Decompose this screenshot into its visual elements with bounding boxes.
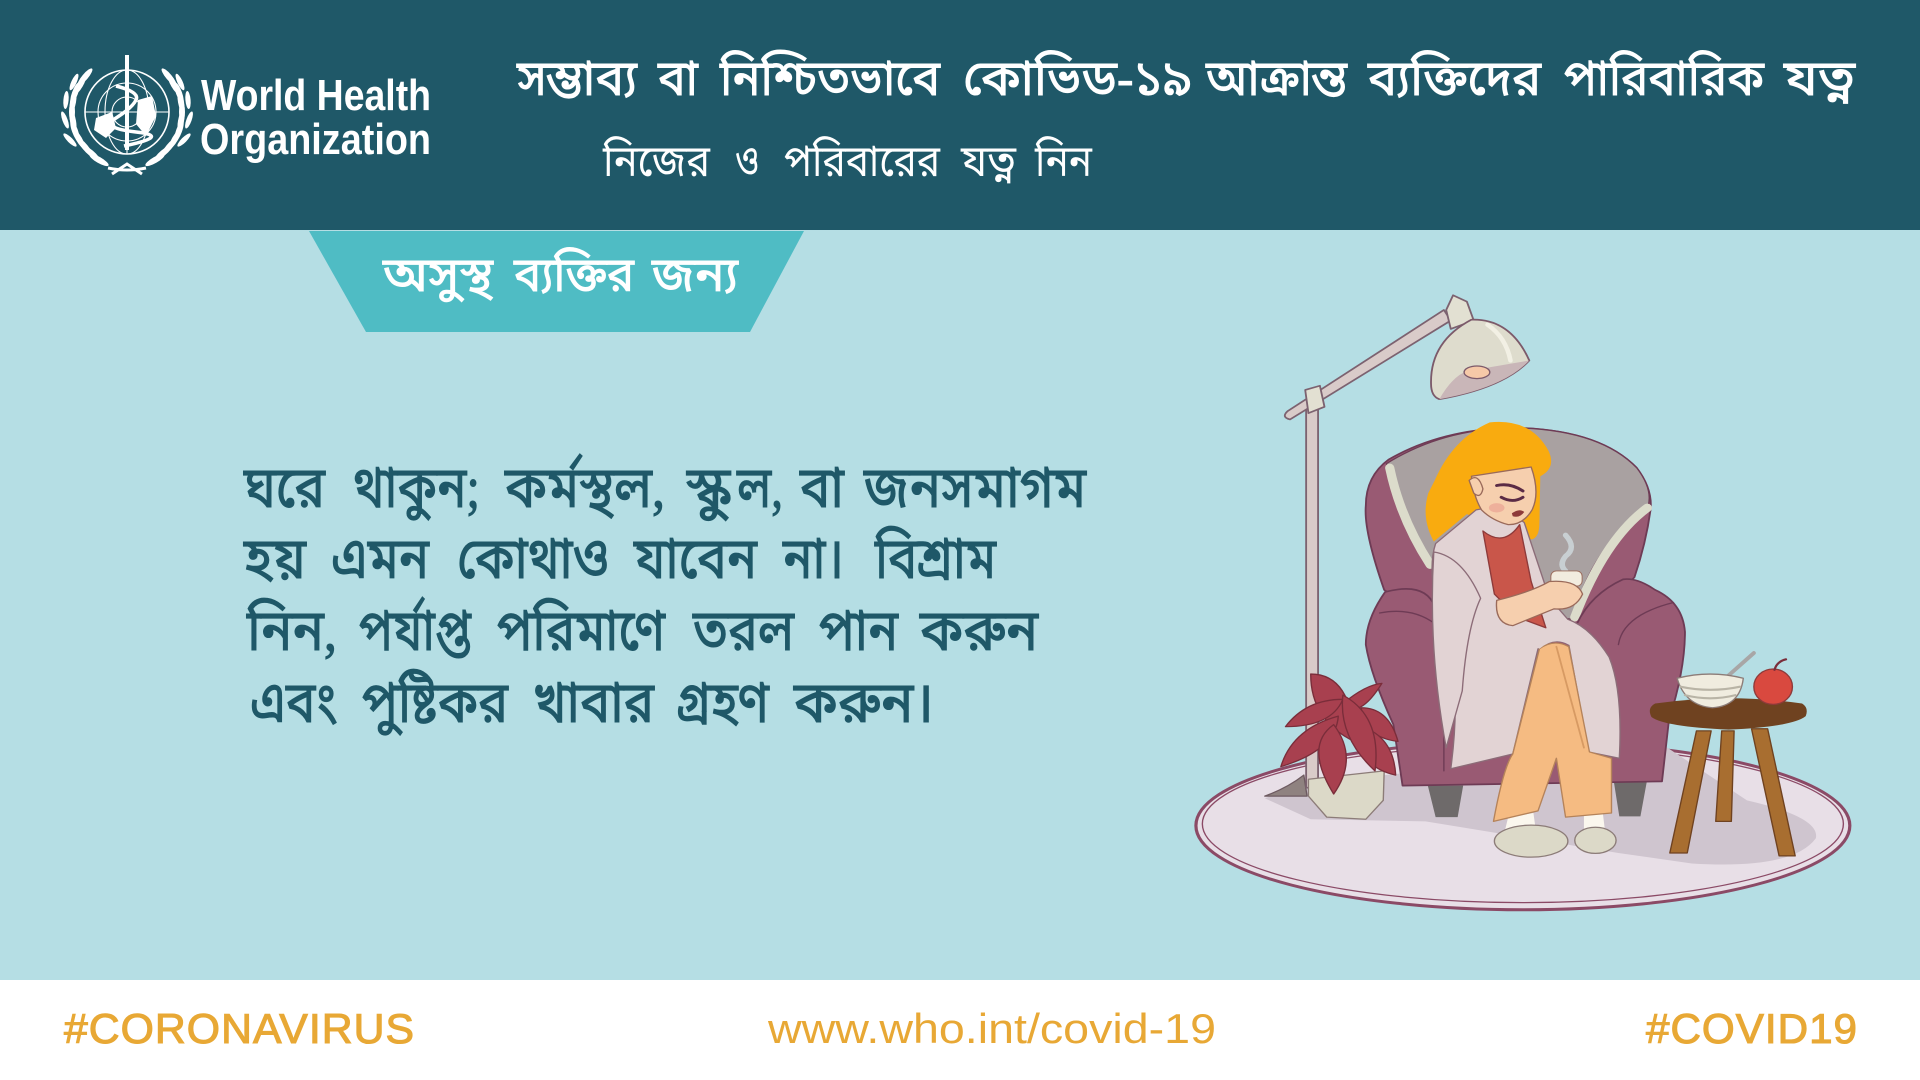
- title: যত্ন: [1783, 50, 1856, 106]
- tab: for the sick person: [309, 231, 804, 332]
- title: বা: [657, 50, 699, 106]
- face: [1471, 467, 1536, 525]
- body text: বা: [799, 455, 845, 520]
- header band: [0, 0, 1920, 230]
- sleeve: [1432, 552, 1481, 748]
- body text: ঘরে: [243, 455, 326, 520]
- WHO wordmark: World Health: [201, 71, 431, 120]
- rug: [1196, 741, 1850, 910]
- potted plant: [1281, 674, 1398, 819]
- body text: পর্যাপ্ত: [359, 596, 472, 663]
- robe: [1432, 506, 1620, 769]
- tab label: ব্যক্তির: [513, 247, 635, 302]
- body text: [243, 453, 1087, 736]
- title: [516, 50, 1856, 106]
- body text: পান: [819, 598, 899, 663]
- body text: জনসমাগম: [863, 455, 1087, 520]
- body text: স্কু: [686, 455, 732, 521]
- body text: পরিমাণে: [497, 598, 666, 663]
- url: www.who.int/covid-19: [767, 1005, 1216, 1052]
- side table with bowl and apple: [1650, 653, 1807, 856]
- subtitle: যত্ন: [960, 137, 1017, 186]
- hair: [1426, 422, 1551, 541]
- robe lap panel: [1504, 624, 1609, 659]
- title: নিশ্চিতভাবে: [719, 50, 941, 106]
- subtitle: নিজের: [602, 135, 711, 186]
- subtitle: নিন: [1034, 135, 1092, 186]
- body text: এমন: [331, 526, 430, 591]
- tab label: [382, 247, 739, 302]
- body text: করুন।: [793, 670, 934, 735]
- socks and slippers: [1504, 809, 1605, 836]
- body text: নিন,: [246, 598, 337, 663]
- WHO wordmark: [200, 71, 431, 164]
- body text: না।: [782, 526, 844, 591]
- body text: কর্মস্থল,: [504, 453, 665, 520]
- subtitle: পরিবারের: [784, 135, 941, 186]
- subtitle: ও: [735, 137, 759, 186]
- mug and steam: [1562, 535, 1571, 571]
- title: পারিবারিক: [1564, 50, 1765, 106]
- body text: ল,: [736, 455, 783, 520]
- body text: গ্রহণ: [676, 670, 770, 735]
- body text: করুন: [919, 598, 1039, 663]
- tab label: অসুস্থ: [382, 249, 494, 302]
- armchair: [1366, 428, 1685, 817]
- body text: খাবার: [533, 670, 655, 735]
- footer band: [0, 980, 1920, 1080]
- illustration: sick woman resting in armchair: [1196, 295, 1850, 910]
- woman: [1426, 422, 1620, 857]
- shirt: [1483, 525, 1546, 628]
- body text: থাকুন;: [353, 455, 480, 521]
- body text: এবং: [250, 670, 337, 735]
- body text: কোথাও: [457, 526, 609, 591]
- body text: বিশ্রাম: [874, 526, 997, 591]
- icon: WHO emblem: [59, 55, 195, 174]
- title: ব্যক্তিদের: [1367, 50, 1542, 106]
- body text: যাবেন: [633, 526, 758, 591]
- body text: হয়: [243, 526, 307, 591]
- tab label: জন্য: [651, 249, 739, 302]
- title: সম্ভাব্য: [516, 50, 637, 106]
- WHO wordmark: Organization: [200, 115, 431, 164]
- title: কোভিড-১৯: [963, 50, 1192, 106]
- body text: পুষ্টিকর: [362, 669, 509, 736]
- hashtag: coronavirus: #CORONAVIRUS: [64, 1005, 415, 1052]
- title: আক্রান্ত: [1205, 50, 1348, 106]
- WHO logo: [59, 55, 431, 174]
- pyjama legs: [1493, 643, 1611, 821]
- hashtag: covid19: #COVID19: [1646, 1005, 1858, 1052]
- floor lamp: [1265, 295, 1529, 796]
- subtitle: [602, 135, 1092, 186]
- hands: [1496, 581, 1583, 626]
- body text: তরল: [692, 598, 795, 663]
